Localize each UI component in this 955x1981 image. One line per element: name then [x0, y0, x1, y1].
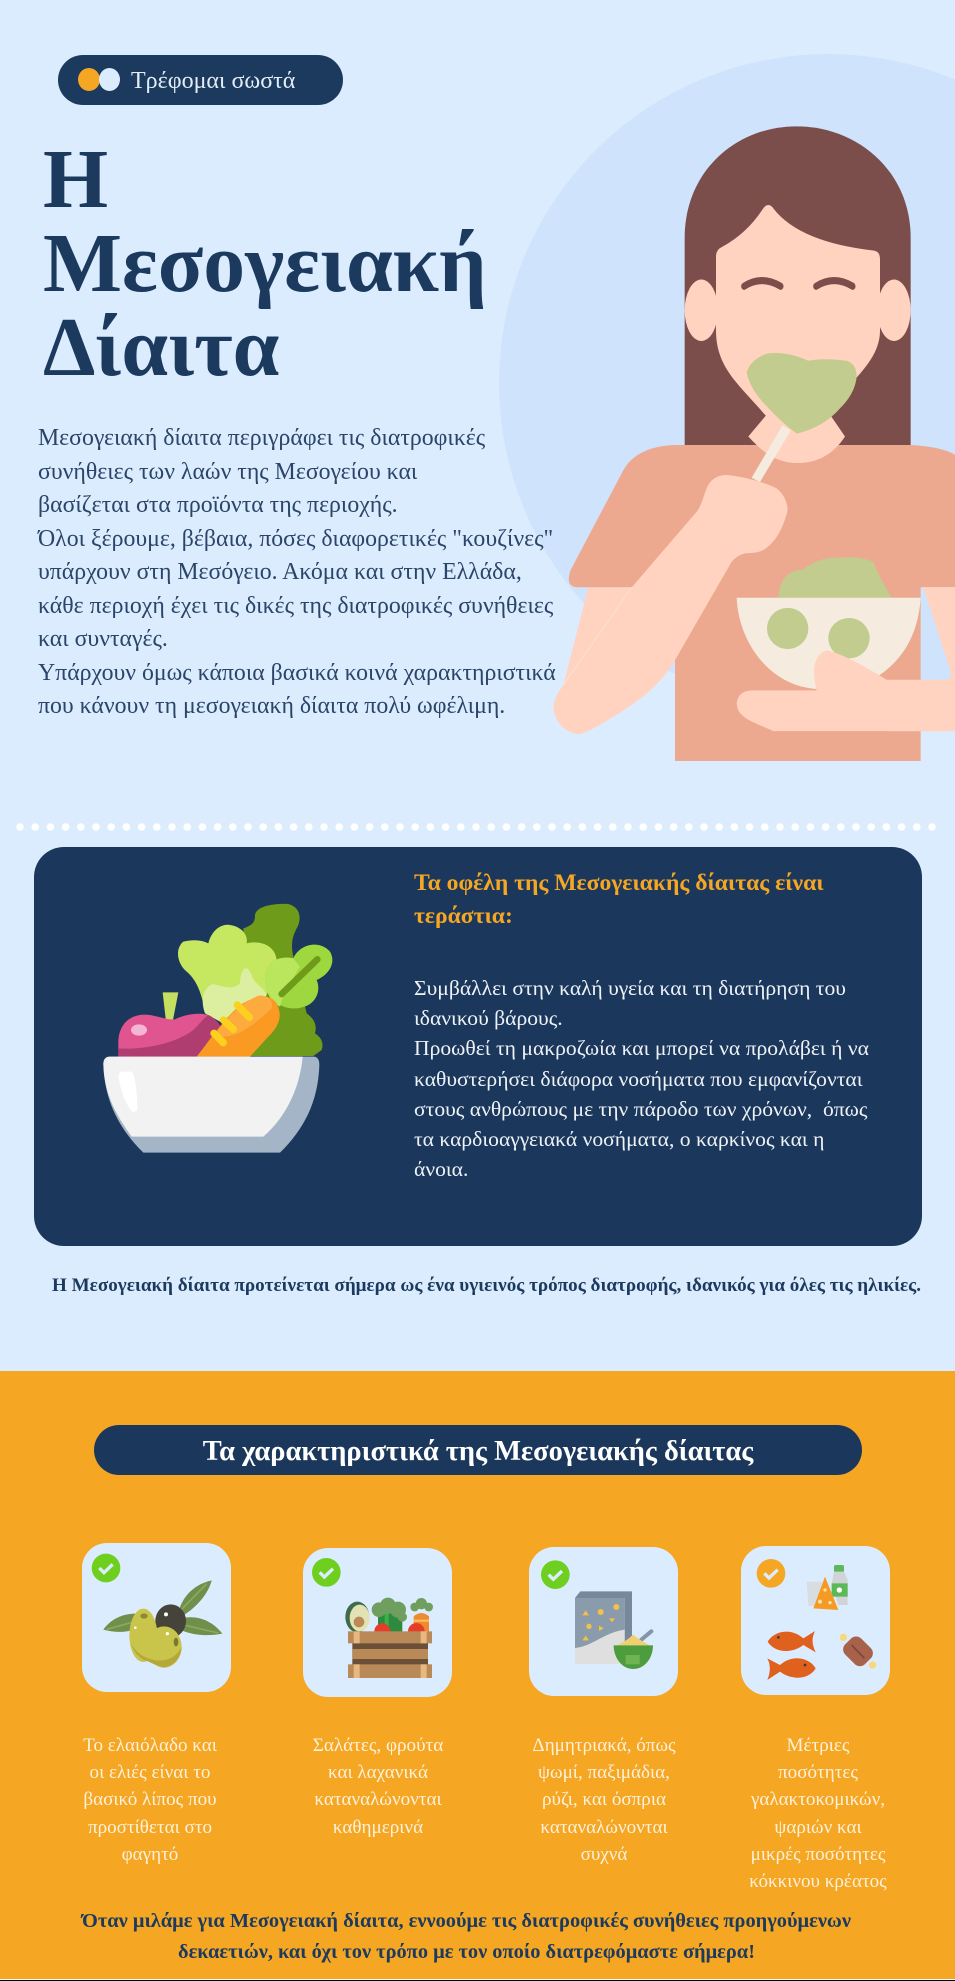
text: salads: και λαχανικά	[328, 1762, 428, 1783]
benefits text: Συμβάλλει στην καλή υγεία και τη διατήρηση του	[414, 976, 846, 1000]
text: olive oil: βασικό λίπος που	[83, 1789, 217, 1810]
section heading pill	[94, 1425, 862, 1475]
benefits text: Προωθεί τη μακροζωία και μπορεί να προλάβει ή να	[414, 1036, 869, 1060]
text: olive oil	[83, 1735, 217, 1865]
icon: check	[757, 1559, 785, 1588]
closing statement: δεκαετιών, και όχι τον τρόπο με τον οποίο διατρεφόμαστε σήμερα!	[178, 1941, 755, 1963]
text: olive oil: οι ελιές είναι το	[90, 1762, 210, 1783]
benefits heading: Τα οφέλη της Μεσογειακής δίαιτας είναι	[414, 870, 824, 896]
benefits heading: τεράστια:	[414, 903, 513, 929]
benefits text: τα καρδιοαγγειακά νοσήματα, ο καρκίνος και η	[414, 1127, 824, 1151]
text: dairy: ποσότητες	[778, 1762, 858, 1783]
intro paragraph: Υπάρχουν όμως κάποια βασικά κοινά χαρακτηριστικά	[38, 660, 556, 686]
intro paragraph: βασίζεται στα προϊόντα της περιοχής.	[38, 492, 398, 518]
text: cereals: ψωμί, παξιμάδια,	[538, 1762, 670, 1783]
icon: white dot	[99, 68, 120, 91]
text: cereals: συχνά	[581, 1844, 627, 1865]
text: salads: καταναλώνονται	[314, 1789, 442, 1810]
text: salads: καθημερινά	[333, 1817, 423, 1838]
benefits text: άνοια.	[414, 1157, 468, 1181]
title: Μεσογειακή	[43, 217, 487, 310]
card: vegetables crate	[303, 1548, 452, 1697]
closing statement	[80, 1910, 851, 1963]
intro paragraph	[37, 425, 556, 719]
icon: salad bowl	[103, 904, 332, 1153]
title	[43, 133, 487, 394]
benefits text	[414, 976, 869, 1181]
text: olive oil: φαγητό	[122, 1844, 178, 1865]
benefits text: καθυστερήσει διάφορα νοσήματα που εμφανίζονται	[414, 1067, 863, 1091]
icon: check	[312, 1558, 341, 1587]
intro paragraph: κάθε περιοχή έχει τις δικές της διατροφικές συνήθειες	[38, 592, 553, 618]
benefits text: στους ανθρώπους με την πάροδο των χρόνων, όπως	[414, 1097, 867, 1121]
text: dairy: ψαριών και	[774, 1817, 862, 1838]
panel: benefits	[34, 847, 922, 1246]
intro paragraph: υπάρχουν στη Μεσόγειο. Ακόμα και στην Ελλάδα,	[38, 559, 522, 585]
benefits text: ιδανικού βάρους.	[414, 1006, 563, 1030]
icon: check	[92, 1554, 120, 1582]
intro paragraph: που κάνουν τη μεσογειακή δίαιτα πολύ ωφέλιμη.	[38, 693, 505, 719]
card: cereals	[529, 1547, 678, 1696]
closing statement: Όταν μιλάμε για Μεσογειακή δίαιτα, εννοούμε τις διατροφικές συνήθειες προηγούμενων	[82, 1910, 851, 1932]
tag pill	[58, 55, 343, 105]
title: Η	[43, 133, 108, 226]
text: cereals: ρύζι, και όσπρια	[542, 1789, 666, 1810]
title: Δίαιτα	[43, 301, 279, 394]
benefits heading	[414, 870, 824, 929]
background circle	[499, 54, 955, 712]
text: cereals: καταναλώνονται	[540, 1817, 668, 1838]
icon: orange dot	[78, 68, 100, 91]
panel: characteristics	[0, 1371, 955, 1979]
illustration: woman eating salad	[553, 126, 955, 761]
tag text: Τρέφομαι σωστά	[131, 68, 295, 94]
text: cereals: Δημητριακά, όπως	[532, 1735, 676, 1756]
intro paragraph: συνήθειες των λαών της Μεσογείου και	[38, 458, 417, 484]
text: salads: Σαλάτες, φρούτα	[313, 1735, 443, 1756]
text: dairy: μικρές ποσότητες	[751, 1844, 885, 1865]
text: olive oil: Το ελαιόλαδο και	[83, 1735, 217, 1756]
text: olive oil: προστίθεται στο	[88, 1817, 212, 1838]
intro paragraph: Όλοι ξέρουμε, βέβαια, πόσες διαφορετικές "κουζίνες"	[38, 526, 553, 552]
card: olives	[82, 1543, 231, 1692]
text: dairy: κόκκινου κρέατος	[749, 1871, 887, 1892]
text: cereals	[532, 1735, 676, 1865]
icon: check	[541, 1560, 570, 1589]
intro paragraph: Μεσογειακή δίαιτα περιγράφει τις διατροφικές	[38, 425, 485, 451]
intro paragraph: και συνταγές.	[38, 626, 168, 652]
card: dairy, fish, meat	[741, 1546, 890, 1695]
text: dairy	[749, 1735, 887, 1892]
text: dairy: γαλακτοκομικών,	[751, 1789, 885, 1810]
section heading pill: Τα χαρακτηριστικά της Μεσογειακής δίαιτας	[203, 1436, 753, 1467]
text: dairy: Μέτριες	[787, 1735, 849, 1756]
statement: Η Μεσογειακή δίαιτα προτείνεται σήμερα ως ένα υγιεινός τρόπος διατροφής, ιδανικός για όλες τις ηλικίες.	[52, 1275, 921, 1296]
text: salads	[313, 1735, 443, 1838]
